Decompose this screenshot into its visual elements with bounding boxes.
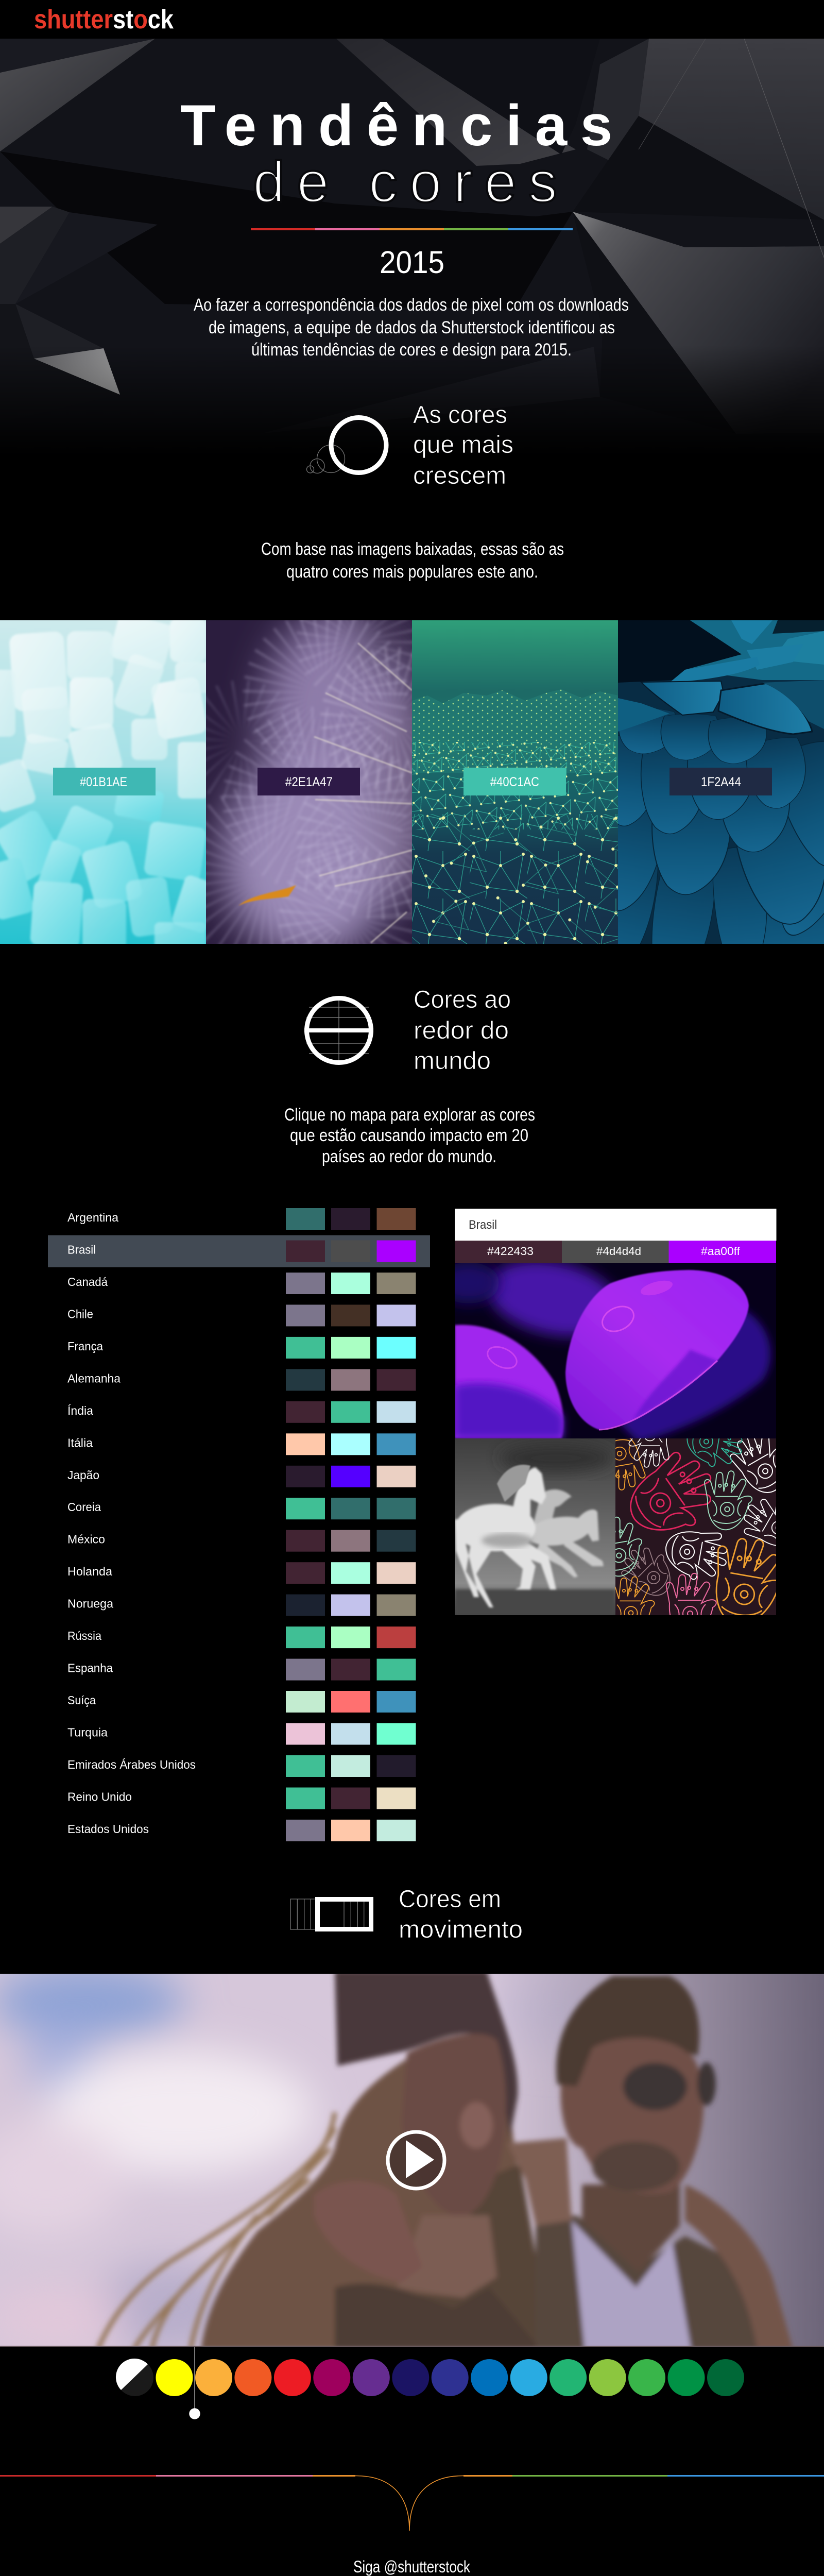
row: Japão: Japão: [67, 1468, 99, 1482]
row: Holanda: [67, 1562, 416, 1584]
selected row highlight: [48, 1235, 430, 1267]
title line 2: de cores: [253, 150, 557, 214]
country name bar: Brasil: [469, 1218, 497, 1232]
row: Brasil: [67, 1241, 416, 1262]
man's hair: [556, 1976, 699, 2087]
intro paragraph: últimas tendências de cores e design para 2015.: [251, 340, 572, 360]
label: #40C1AC: #40C1AC: [490, 775, 539, 789]
panel: ice photo with colour label: [0, 620, 206, 944]
row: França: França: [67, 1340, 103, 1353]
heading: as cores que mais crescem: [413, 401, 513, 489]
row: Turquia: Turquia: [67, 1726, 108, 1739]
text block: popular colours: [261, 539, 564, 582]
panel: country colour list: [48, 1208, 430, 1841]
heading: cores ao redor do mundo: [414, 986, 511, 1075]
woman's hat: [335, 1971, 518, 2138]
row: Espanha: Espanha: [67, 1662, 113, 1675]
man's neck and face: [582, 2184, 680, 2272]
text block: popular colours: Com base nas imagens baixadas, essas são as: [261, 539, 564, 559]
timeline scrubber: [189, 2347, 200, 2419]
row: Brasil: Brasil: [67, 1243, 96, 1256]
woman's blown hair strands: [98, 2112, 335, 2349]
row: Emirados Árabes Unidos: Emirados Árabes Unidos: [67, 1758, 196, 1771]
heading: as cores que mais crescem: que mais: [413, 431, 513, 459]
play button: [388, 2132, 444, 2189]
row: Índia: [67, 1401, 416, 1423]
label: #40C1AC: [464, 768, 566, 795]
label: #01B1AE: #01B1AE: [80, 775, 127, 789]
text block: map instructions: Clique no mapa para explorar as cores: [284, 1105, 535, 1125]
label: #01B1AE: [53, 768, 156, 795]
heading: cores ao redor do mundo: redor do: [414, 1017, 509, 1044]
palette swatches with hex codes: [455, 1241, 776, 1263]
logo: shutterstock: shutterstock: [34, 5, 174, 35]
palette swatches with hex codes: #4d4d4d: [596, 1245, 641, 1258]
hand on shoulder: [314, 2181, 422, 2282]
icon: globe: [304, 997, 373, 1064]
row: Turquia: [67, 1723, 416, 1744]
title line 1: Tendências: [180, 93, 612, 158]
footer rainbow line with drop: [0, 2476, 824, 2531]
palette swatches with hex codes: #aa00ff: [701, 1245, 741, 1258]
label: 1F2A44: 1F2A44: [701, 775, 741, 789]
panel: dandelion photo with colour label: [206, 620, 412, 944]
row: Espanha: [67, 1659, 416, 1681]
heading: as cores que mais crescem: As cores: [413, 401, 507, 429]
row: Alemanha: Alemanha: [67, 1371, 121, 1385]
row: Estados Unidos: [67, 1820, 416, 1841]
row: Noruega: Noruega: [67, 1597, 113, 1611]
heading: cores ao redor do mundo: mundo: [414, 1047, 491, 1075]
row: Argentina: [67, 1208, 416, 1230]
man's jacket: [536, 2215, 793, 2349]
rainbow divider: [251, 228, 573, 230]
heading: cores ao redor do mundo: Cores ao: [414, 986, 511, 1013]
palette swatches with hex codes: #422433: [487, 1245, 534, 1258]
row: Rússia: Rússia: [67, 1629, 101, 1642]
row: Chile: [67, 1304, 416, 1326]
row: Itália: Itália: [67, 1436, 93, 1449]
row: França: [67, 1337, 416, 1359]
photo: white horses: [455, 1438, 615, 1615]
label: 1F2A44: [670, 768, 772, 795]
text block: map instructions: [284, 1105, 535, 1166]
row: Itália: [67, 1433, 416, 1455]
row: Rússia: [67, 1626, 416, 1648]
row: Reino Unido: [67, 1788, 416, 1809]
row: Emirados Árabes Unidos: [67, 1755, 416, 1777]
row: Índia: Índia: [67, 1404, 93, 1417]
photo: jellyfish: [455, 1263, 776, 1438]
heading: cores em movimento: [399, 1886, 523, 1943]
intro paragraph: de imagens, a equipe de dados da Shutterstock identificou as: [209, 318, 615, 337]
woman's chest and top: [397, 2215, 497, 2298]
year: 2015: [380, 245, 444, 280]
country name bar: [455, 1209, 777, 1241]
row: Chile: Chile: [67, 1307, 93, 1320]
woman's main hair mass: [201, 2056, 546, 2349]
colour selector dots: [116, 2359, 744, 2396]
heading: cores em movimento: Cores em: [399, 1886, 501, 1913]
row: Reino Unido: Reino Unido: [67, 1790, 132, 1803]
row: México: [67, 1530, 416, 1552]
heading: cores em movimento: movimento: [399, 1916, 523, 1943]
row: Japão: [67, 1466, 416, 1487]
row: Suíça: [67, 1691, 416, 1713]
row: Alemanha: [67, 1369, 416, 1391]
man's sunglasses: [623, 2063, 687, 2110]
icon: growing circles: [307, 417, 386, 473]
row: México: México: [67, 1533, 105, 1546]
man's shirt: [572, 2221, 691, 2349]
row: Coreia: Coreia: [67, 1500, 101, 1514]
row: Argentina: Argentina: [67, 1211, 118, 1224]
intro paragraph: [194, 295, 629, 360]
row: Canadá: Canadá: [67, 1275, 108, 1289]
label: #2E1A47: [258, 768, 360, 795]
hero background: dark polygon shards: [0, 39, 824, 456]
heading: as cores que mais crescem: crescem: [413, 462, 506, 489]
photo: hamsa pattern: [615, 1438, 776, 1615]
panel: video still with couple: [0, 1965, 824, 2354]
panel: feathers photo with colour label: [618, 620, 824, 944]
label: #2E1A47: #2E1A47: [285, 775, 333, 789]
text block: popular colours: quatro cores mais populares este ano.: [286, 562, 538, 582]
title block: [180, 93, 612, 280]
dot: white and black: [116, 2359, 153, 2396]
row: Suíça: Suíça: [67, 1693, 96, 1707]
panel: network photo with colour label: [412, 620, 618, 944]
panel: selected country detail: [455, 1209, 777, 1615]
man's arm and shoulder: [507, 2138, 572, 2226]
row: Noruega: [67, 1595, 416, 1616]
woman's face: [402, 2033, 506, 2216]
icon: film frames: [290, 1899, 371, 1929]
video timeline bar: [0, 2346, 824, 2347]
text block: map instructions: que estão causando impacto em 20: [290, 1126, 528, 1145]
follow text: Siga @shutterstock: [353, 2557, 471, 2576]
text block: map instructions: países ao redor do mundo.: [322, 1147, 496, 1166]
row: Canadá: [67, 1273, 416, 1294]
row: Coreia: [67, 1498, 416, 1519]
header bar with logo: [0, 0, 824, 39]
row: Holanda: Holanda: [67, 1565, 112, 1578]
intro paragraph: Ao fazer a correspondência dos dados de pixel com os downloads: [194, 295, 629, 315]
row: Estados Unidos: Estados Unidos: [67, 1822, 149, 1836]
